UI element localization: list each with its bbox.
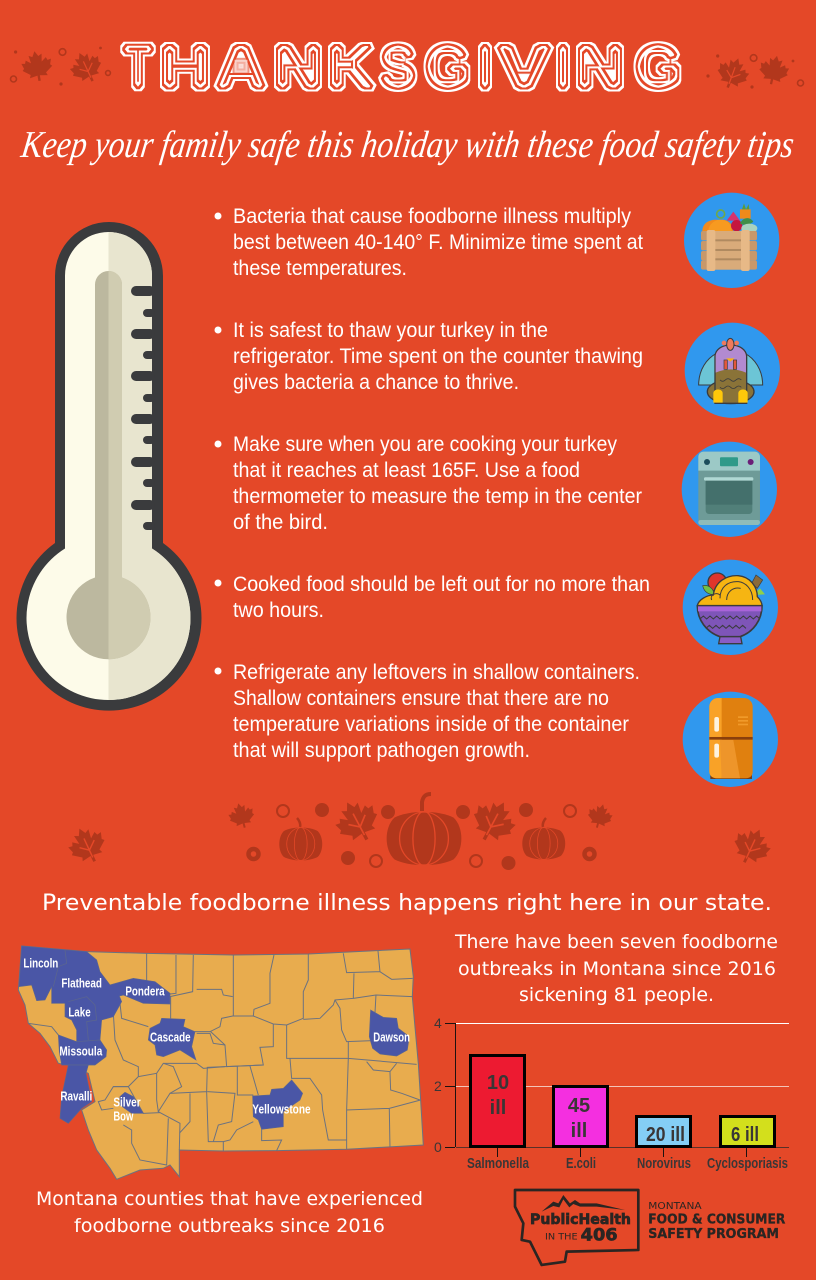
- tip 2 text: refrigerator. Time spent on the counter thawing: [233, 344, 643, 368]
- tip 3 text: Make sure when you are cooking your turkey: [233, 432, 617, 456]
- tip 5 text: that will support pathogen growth.: [233, 738, 530, 762]
- title: V: [498, 34, 550, 100]
- bar: Cyclosporiasis: 6 ill: [731, 1124, 759, 1146]
- axis labels: 0: [434, 1139, 442, 1155]
- title: S: [380, 34, 416, 100]
- county names: Lincoln: [23, 955, 58, 970]
- bar: Salmonella: 10: [487, 1072, 509, 1094]
- county names: Silver: [113, 1095, 141, 1110]
- logo: Public Health in the 406: [515, 1190, 638, 1265]
- category labels: [467, 1155, 788, 1172]
- tip 2 text: [214, 318, 643, 394]
- title: N: [576, 34, 624, 100]
- bar: E.coli: 45: [568, 1095, 590, 1117]
- state outline: [18, 946, 423, 1179]
- logo: Public Health in the 406: 406: [581, 1226, 618, 1245]
- section heading: Preventable foodborne illness happens right here in our state.: [42, 890, 772, 916]
- logo: Montana Food and Consumer Safety Program: [648, 1201, 785, 1242]
- axis labels: 2: [434, 1078, 442, 1094]
- tip 3 text: that it reaches at least 165F. Use a food: [233, 458, 580, 482]
- icon: produce crate: [684, 193, 779, 288]
- tip 1 text: best between 40-140° F. Minimize time spent at: [233, 230, 643, 254]
- title: K: [328, 34, 374, 100]
- logo: Public Health in the 406: IN THE: [545, 1232, 578, 1242]
- county names: Lake: [68, 1005, 91, 1020]
- top right decoration: leaves: [706, 53, 804, 93]
- tip 4 text: Cooked food should be left out for no more than: [233, 572, 650, 596]
- logo: Montana Food and Consumer Safety Program: SAFETY PROGRAM: [648, 1227, 779, 1242]
- map caption: [36, 1188, 423, 1237]
- county names: Pondera: [125, 983, 165, 998]
- bar: Cyclosporiasis: [720, 1116, 774, 1146]
- bar: E.coli: ill: [571, 1120, 587, 1142]
- map caption: Montana counties that have experienced: [36, 1188, 423, 1210]
- title: N: [274, 34, 322, 100]
- category labels: Salmonella: [467, 1155, 530, 1172]
- map of Montana counties: [18, 946, 423, 1179]
- pumpkin and leaf divider: [63, 793, 776, 870]
- chart intro text: outbreaks in Montana since 2016: [458, 958, 776, 980]
- tip 5 text: Shallow containers ensure that there are no: [233, 686, 609, 710]
- title: H: [160, 34, 210, 100]
- chart intro text: [454, 931, 778, 1006]
- bar: Norovirus: 20 ill: [646, 1124, 685, 1146]
- logo: Public Health in the 406: PublicHealth: [530, 1212, 631, 1228]
- county names: Cascade: [150, 1029, 191, 1044]
- title: A: [216, 34, 266, 100]
- tip 4 text: two hours.: [233, 598, 324, 622]
- tip 1 text: Bacteria that cause foodborne illness multiply: [233, 204, 631, 228]
- bar chart: [434, 1015, 789, 1172]
- logo: Montana Food and Consumer Safety Program: FOOD & CONSUMER: [648, 1213, 785, 1228]
- tip 2 text: gives bacteria a chance to thrive.: [233, 370, 519, 394]
- icon: turkey: [685, 323, 780, 418]
- bar: Salmonella: [470, 1056, 524, 1146]
- title: I: [478, 34, 492, 100]
- title: T: [123, 34, 153, 100]
- county names: Dawson: [373, 1029, 410, 1044]
- bar: Salmonella: ill: [490, 1097, 506, 1119]
- title: G: [635, 34, 681, 100]
- tip 2 text: It is safest to thaw your turkey in the: [233, 318, 548, 342]
- tip 5 text: temperature variations inside of the container: [233, 712, 629, 736]
- county names: Missoula: [59, 1044, 103, 1059]
- outbreak counties: [19, 946, 409, 1129]
- axis labels: [434, 1015, 442, 1155]
- thermometer: [16, 222, 202, 711]
- bar: E.coli: [554, 1086, 608, 1146]
- tip 3 text: thermometer to measure the temp in the center: [233, 484, 642, 508]
- county names: Bow: [113, 1109, 134, 1124]
- county names: Yellowstone: [252, 1102, 311, 1117]
- icon: refrigerator: [683, 692, 778, 787]
- title: G: [425, 34, 470, 100]
- tip 5 text: [214, 660, 640, 762]
- chart intro text: sickening 81 people.: [519, 984, 714, 1006]
- category labels: E.coli: [566, 1155, 596, 1172]
- top left decoration: leaves: [10, 46, 110, 88]
- tip 1 text: [214, 204, 643, 280]
- county names: [23, 955, 410, 1124]
- tip 1 text: these temperatures.: [233, 256, 407, 280]
- tip 3 text: [214, 432, 642, 534]
- tip 5 text: Refrigerate any leftovers in shallow containers.: [233, 660, 640, 684]
- logo: Montana Food and Consumer Safety Program: MONTANA: [648, 1201, 702, 1212]
- axis labels: 4: [434, 1015, 442, 1031]
- tip 4 text: [214, 572, 650, 622]
- county names: Flathead: [61, 975, 102, 990]
- bar: Norovirus: [636, 1116, 690, 1146]
- tip 3 text: of the bird.: [233, 510, 328, 534]
- county names: Ravalli: [60, 1089, 92, 1104]
- icon: food bowl: [683, 560, 778, 655]
- icon: oven: [682, 442, 777, 537]
- map caption: foodborne outbreaks since 2016: [74, 1215, 385, 1237]
- category labels: Cyclosporiasis: [707, 1155, 788, 1172]
- county boundaries: [28, 951, 421, 1165]
- category labels: Norovirus: [637, 1155, 691, 1172]
- chart intro text: There have been seven foodborne: [454, 931, 778, 953]
- title: I: [556, 34, 570, 100]
